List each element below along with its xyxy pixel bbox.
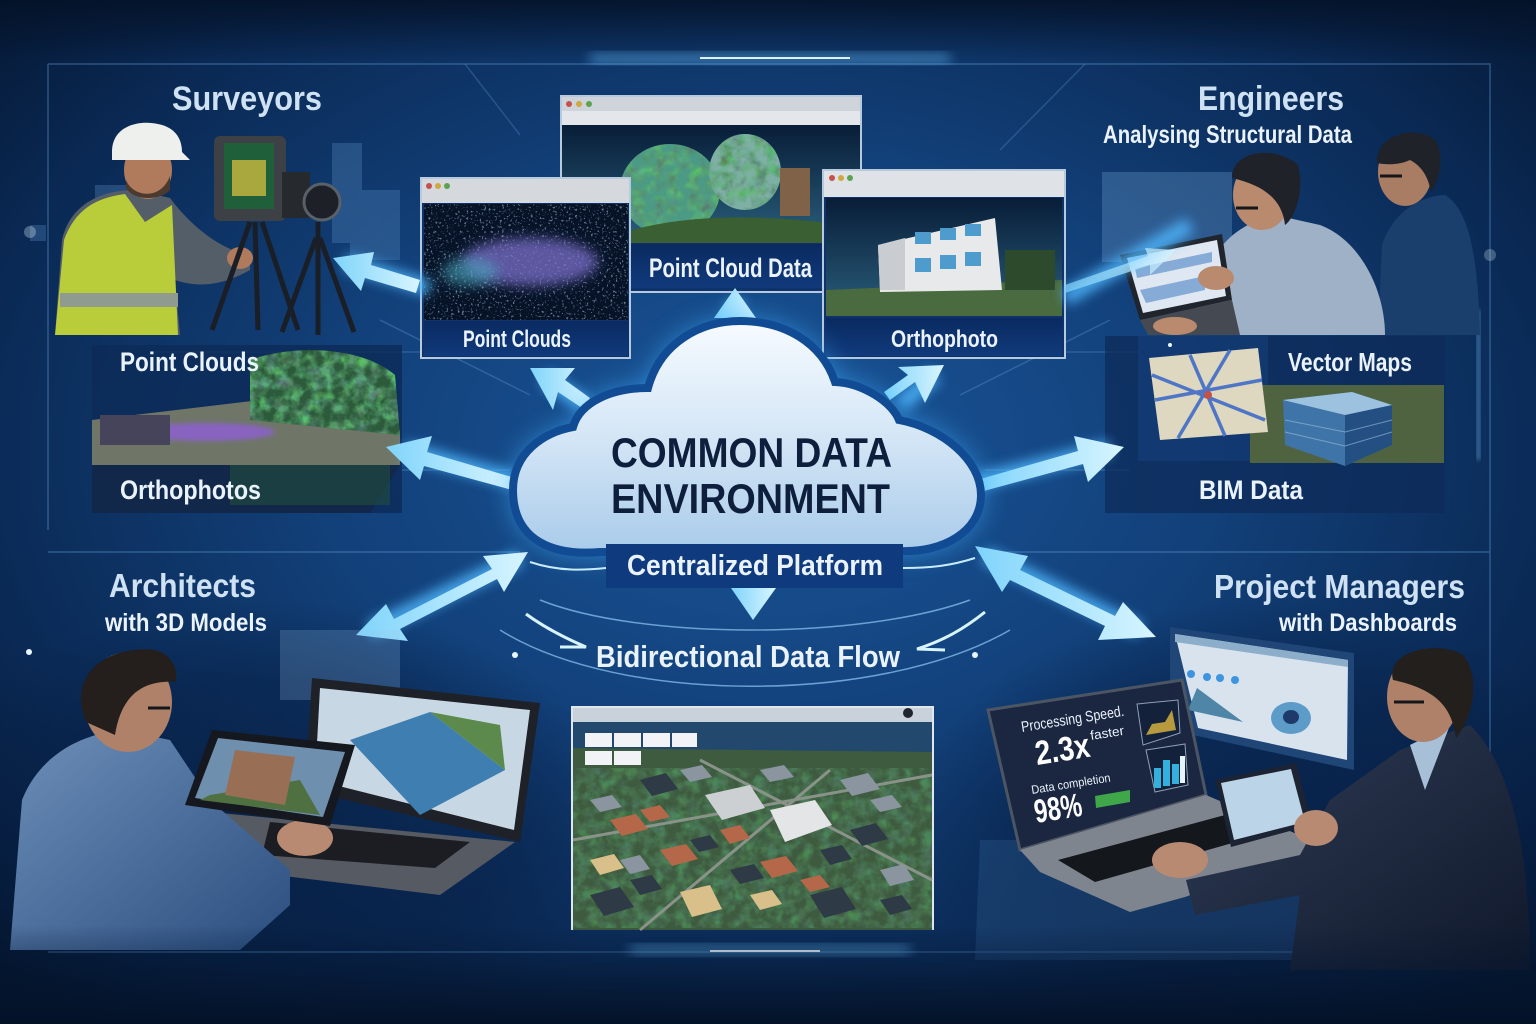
label: Point Clouds: Point Clouds <box>120 347 259 377</box>
arrow from cloud down <box>731 588 776 620</box>
engineer in navy shirt <box>1377 133 1480 335</box>
ribbon: centralized platform <box>530 544 975 588</box>
building hologram <box>1102 172 1232 262</box>
arrow to point cloud data <box>714 288 756 325</box>
hologram building <box>280 630 400 700</box>
area chart <box>1137 700 1180 745</box>
panel: aerial photo window <box>571 706 934 930</box>
arrow to right panel <box>977 436 1124 492</box>
label: Vector Maps: Vector Maps <box>1288 347 1412 377</box>
laptop with KPIs <box>988 680 1327 912</box>
top shading <box>0 0 1536 60</box>
text: processing speed: Processing Speed. <box>1020 703 1125 736</box>
panel: surveyors <box>30 80 400 335</box>
ribbon: centralized platform: Centralized Platform <box>627 550 883 582</box>
BIM building <box>1283 392 1392 466</box>
panel: project managers <box>975 568 1530 970</box>
label: Bidirectional Data Flow: Bidirectional Data Flow <box>596 639 901 674</box>
aerial roofs <box>590 765 914 918</box>
glow nodes <box>24 226 1496 658</box>
panel: architects <box>10 567 540 950</box>
panel: browser window Point Clouds <box>421 178 630 358</box>
small flow arrow right <box>917 612 985 650</box>
panel: browser window Orthophoto <box>823 170 1065 358</box>
city skyline behind surveyor <box>30 143 400 265</box>
heading: Architects: Architects <box>109 567 256 604</box>
arrow to engineers <box>1065 248 1176 293</box>
tablet with building <box>185 730 355 826</box>
laser scanner on tripod <box>212 136 354 335</box>
back monitor dashboard <box>1170 627 1354 770</box>
arrows: radiating data flow <box>333 225 1190 650</box>
architect person <box>10 649 333 950</box>
manager person <box>1152 648 1530 970</box>
arrow to point clouds window <box>530 368 590 410</box>
map sheet <box>1149 348 1268 440</box>
vignette <box>0 925 1536 1024</box>
label: Orthophoto: Orthophoto <box>891 326 998 353</box>
tablet <box>1215 763 1312 847</box>
heading: Engineers: Engineers <box>1198 80 1344 118</box>
heading: Surveyors: Surveyors <box>172 80 322 118</box>
panel: browser window Point Cloud Data <box>561 96 861 292</box>
label: Orthophotos: Orthophotos <box>120 475 261 505</box>
title: COMMON DATA: COMMON DATA <box>611 429 892 476</box>
bidirectional arrow to project managers <box>975 546 1156 640</box>
desk <box>975 840 1300 960</box>
arrow to left panel <box>386 436 515 490</box>
small flow arrow left <box>526 614 586 647</box>
text: 2.3x: 2.3x <box>1032 727 1093 773</box>
glow: top and bottom light bars <box>590 54 1480 954</box>
green progress bar <box>1095 790 1130 808</box>
subheading: with 3D Models: with 3D Models <box>104 609 267 637</box>
arrow to surveyors <box>333 252 420 293</box>
text: faster: faster <box>1089 723 1126 743</box>
bidirectional arrow to architects <box>356 552 528 641</box>
label: Point Clouds window caption: Point Clouds <box>463 326 571 353</box>
back laptop with 3D model <box>190 678 540 895</box>
lower corner shading <box>0 600 1536 1024</box>
label: BIM Data: BIM Data <box>1199 475 1304 505</box>
title: ENVIRONMENT: ENVIRONMENT <box>611 475 890 522</box>
subheading: Analysing Structural Data: Analysing Structural Data <box>1103 121 1353 149</box>
forest and terrain image <box>92 345 400 513</box>
cloud: common data environment <box>513 321 981 588</box>
subheading: with Dashboards: with Dashboards <box>1278 609 1457 637</box>
label: Point Cloud Data: Point Cloud Data <box>649 253 813 283</box>
text: data completion: Data completion <box>1030 771 1111 797</box>
panel: vector maps and BIM data <box>1105 336 1445 513</box>
surveyor person <box>55 123 253 335</box>
panel: engineers <box>1102 80 1480 335</box>
engineer laptop <box>1120 234 1240 335</box>
heading: Project Managers: Project Managers <box>1214 568 1465 605</box>
engineer in light shirt <box>1195 153 1385 335</box>
aerial roads and tree texture <box>573 760 932 930</box>
bar chart <box>1146 744 1188 792</box>
arrow to orthophoto window <box>884 365 944 403</box>
text: 98 percent: 98% <box>1031 786 1085 830</box>
panel: point clouds and orthophotos left <box>92 345 402 513</box>
